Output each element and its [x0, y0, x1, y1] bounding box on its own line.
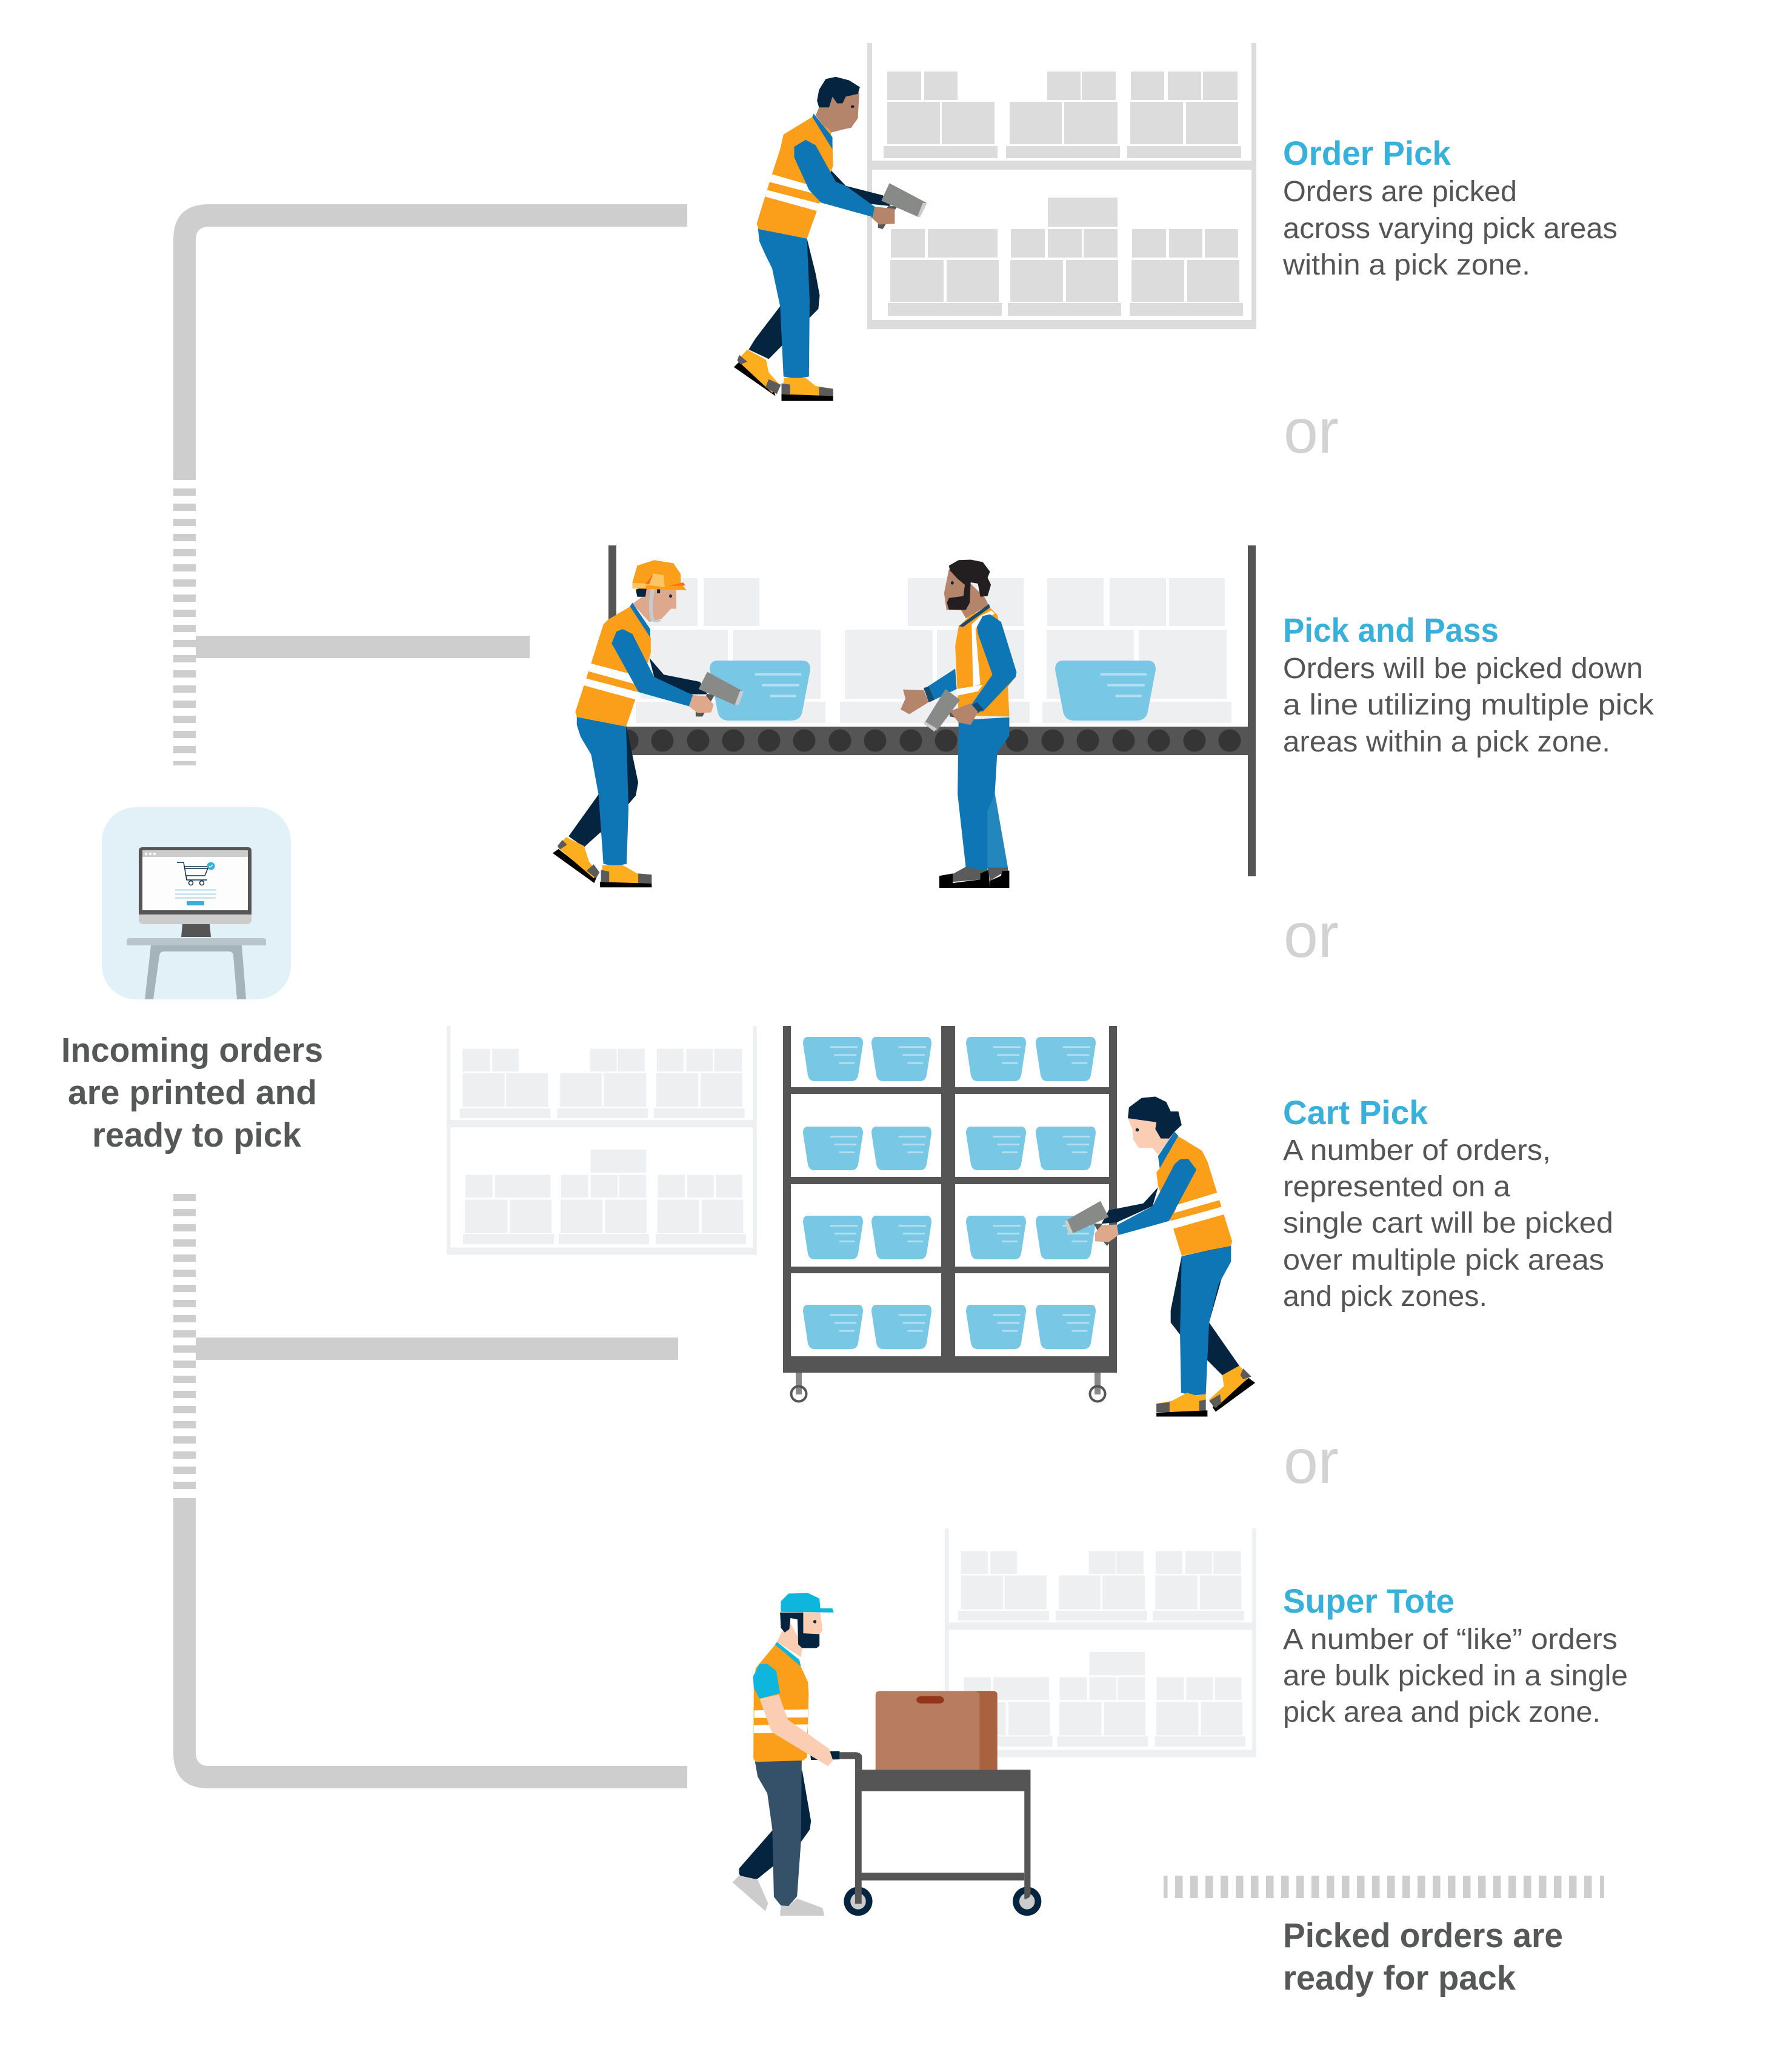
heading: picked orders ready for pack: Picked orders are	[1283, 1916, 1563, 1955]
text: order pick: Orders are picked	[1283, 176, 1517, 208]
heading: incoming orders: are printed and	[68, 1073, 317, 1112]
connector: end dashed line	[1164, 1876, 1604, 1898]
tote on conveyor	[710, 661, 810, 721]
heading: incoming orders: Incoming orders	[61, 1031, 323, 1070]
connector: bottom bracket	[173, 1498, 687, 1788]
conveyor background boxes	[636, 578, 1231, 723]
cart with totes	[783, 1026, 1117, 1401]
cart wheels	[791, 1373, 1105, 1401]
heading: picked orders ready for pack	[1283, 1916, 1563, 1997]
text: cart pick: and pick zones.	[1283, 1281, 1487, 1313]
text: cart pick	[1283, 1093, 1613, 1313]
text: cart pick: single cart will be picked	[1283, 1207, 1613, 1239]
worker: hard hat picker	[553, 560, 744, 887]
heading: incoming orders	[61, 1031, 323, 1154]
text: super tote: pick area and pick zone.	[1283, 1696, 1601, 1728]
text: order pick: within a pick zone.	[1282, 249, 1530, 281]
text: pick and pass	[1283, 611, 1654, 758]
text: cart pick: over multiple pick areas	[1283, 1244, 1604, 1276]
conveyor with rollers	[608, 545, 1256, 876]
icon: computer on desk	[102, 807, 291, 999]
shelf: order pick	[867, 43, 1256, 329]
text: super tote: A number of “like” orders	[1283, 1624, 1618, 1656]
or separator 2: or	[1284, 901, 1339, 971]
connector: cart pick branch	[196, 1337, 678, 1360]
text: order pick: Order Pick	[1283, 134, 1451, 172]
heading: picked orders ready for pack: ready for pack	[1283, 1959, 1516, 1997]
or separator 1: or	[1284, 396, 1339, 467]
connector: pick and pass branch	[196, 636, 530, 658]
connector: top bracket	[173, 204, 687, 480]
text: order pick	[1282, 134, 1618, 281]
text: pick and pass: a line utilizing multiple pick	[1283, 689, 1654, 721]
connector: top dashed line	[173, 488, 196, 765]
shelf: super tote background	[945, 1528, 1256, 1757]
worker: order picker	[734, 77, 927, 401]
connector: lower dashed line	[173, 1194, 196, 1494]
text: order pick: across varying pick areas	[1283, 213, 1618, 245]
text: super tote	[1283, 1582, 1628, 1728]
text: super tote: are bulk picked in a single	[1283, 1660, 1628, 1692]
text: cart pick: Cart Pick	[1283, 1093, 1428, 1131]
or separator 3: or	[1284, 1427, 1339, 1497]
tote on conveyor	[1055, 661, 1156, 721]
worker: man pushing trolley	[733, 1593, 839, 1916]
worker: bearded picker with tablet	[901, 559, 1016, 888]
text: cart pick: represented on a	[1283, 1171, 1510, 1203]
trolley with box	[839, 1691, 1041, 1916]
text: pick and pass: Pick and Pass	[1283, 611, 1499, 649]
heading: incoming orders: ready to pick	[92, 1116, 301, 1154]
shelf: cart pick background	[447, 1026, 757, 1255]
worker: woman picker	[1065, 1096, 1255, 1417]
text: pick and pass: areas within a pick zone.	[1283, 726, 1610, 758]
text: super tote: Super Tote	[1283, 1582, 1454, 1620]
text: pick and pass: Orders will be picked down	[1283, 653, 1643, 685]
text: cart pick: A number of orders,	[1283, 1134, 1551, 1167]
